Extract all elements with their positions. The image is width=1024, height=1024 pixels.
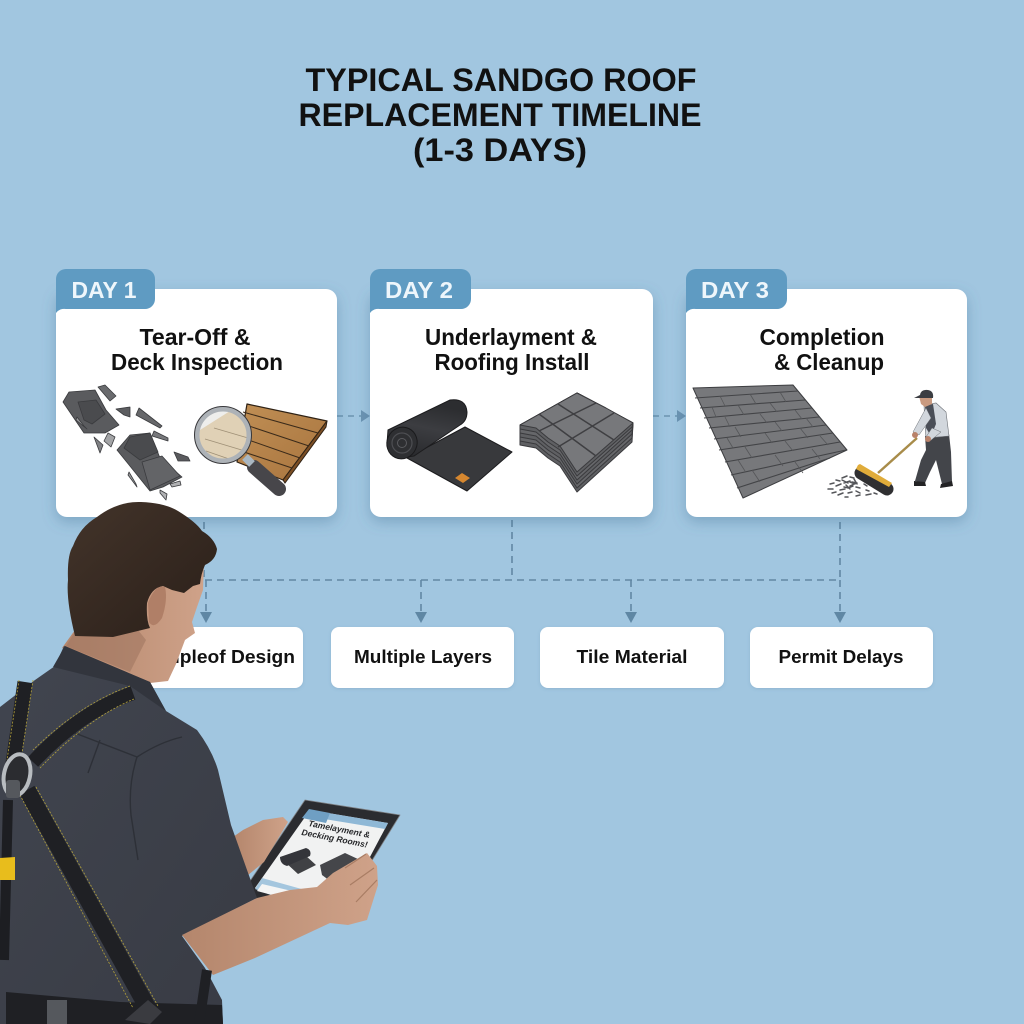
- icon: debris: [828, 476, 877, 497]
- card: day 3: [686, 289, 967, 517]
- left hand: [233, 817, 288, 875]
- heading: completion: & Cleanup: [774, 349, 884, 375]
- arrow: day 2 to day 3: [653, 410, 686, 422]
- icon: magnifying glass: [194, 406, 279, 489]
- belt: [6, 992, 223, 1024]
- head: [919, 396, 932, 407]
- heading: underlayment: Roofing Install: [434, 349, 590, 375]
- fingers shading: [345, 854, 377, 902]
- factor: multiple layers: [331, 627, 514, 688]
- neck and face: [62, 560, 204, 683]
- title: [298, 62, 702, 168]
- tablet screen roll: [280, 848, 316, 874]
- panel: day 2: [370, 269, 653, 517]
- torso: [924, 403, 949, 438]
- panel: day 3: [686, 269, 967, 517]
- torso: [0, 646, 257, 1024]
- heading: completion: Completion: [760, 324, 884, 350]
- panel: day 1: [56, 269, 337, 517]
- tablet screen text: Tamelayment &: [308, 818, 371, 840]
- card: day 1: [56, 289, 337, 517]
- arrow: day 1 to day 2: [337, 410, 370, 422]
- factor: roof design: Multipleof Design: [135, 646, 295, 667]
- collar: [53, 646, 166, 711]
- title: TYPICAL SANDGO ROOF: [306, 62, 696, 98]
- label: day 2: DAY 2: [385, 277, 453, 303]
- yellow clip: [0, 857, 15, 880]
- icon: wood deck: [237, 404, 327, 483]
- factor: multiple layers: Multiple Layers: [354, 646, 492, 667]
- tablet screen text: [301, 817, 371, 850]
- heading: underlayment: Underlayment &: [425, 324, 597, 350]
- factor: tile material: [540, 627, 724, 688]
- jaw shadow: [66, 620, 146, 672]
- heading: tear-off: Tear-Off &: [140, 324, 250, 350]
- factor: roof design: [120, 627, 303, 688]
- strap buckle: [125, 1000, 162, 1024]
- tab: day 1: [56, 269, 155, 313]
- tab: day 3: [686, 269, 787, 313]
- title: REPLACEMENT TIMELINE: [298, 97, 702, 133]
- connector arrowheads: [200, 612, 846, 623]
- factor: permit delays: Permit Delays: [778, 646, 904, 667]
- factor: permit delays: [750, 627, 933, 688]
- heading: completion: [760, 324, 884, 375]
- factor: tile material: Tile Material: [576, 646, 688, 667]
- broom: [856, 438, 917, 489]
- arm: [182, 853, 378, 975]
- legs: [915, 434, 952, 484]
- heading: tear-off: Deck Inspection: [111, 349, 283, 375]
- icon: shingle stack: [520, 393, 633, 492]
- tab: day 2: [370, 269, 471, 313]
- connector lines to factors: [204, 520, 840, 612]
- hands: [912, 432, 918, 438]
- icon: torn-off shingles: [63, 385, 190, 500]
- icon: underlayment roll: [382, 400, 512, 491]
- heading: tear-off: [111, 324, 283, 375]
- harness straps: [4, 680, 207, 1024]
- tablet screen shingles: [320, 853, 360, 881]
- hair: [68, 502, 217, 637]
- harness ring: [0, 752, 34, 798]
- icon: worker with broom: [856, 390, 953, 489]
- figure: roofer with tablet: [0, 502, 400, 1024]
- icon: finished roof: [693, 385, 847, 498]
- heading: underlayment: [425, 324, 597, 375]
- tablet: [248, 800, 400, 908]
- tablet screen text: Decking Rooms!: [301, 827, 369, 850]
- title: (1-3 DAYS): [413, 132, 587, 168]
- shirt seams: [67, 730, 182, 860]
- card: day 2: [370, 289, 653, 517]
- label: day 1: DAY 1: [72, 277, 136, 303]
- label: day 3: DAY 3: [701, 277, 769, 303]
- ear: [148, 587, 166, 625]
